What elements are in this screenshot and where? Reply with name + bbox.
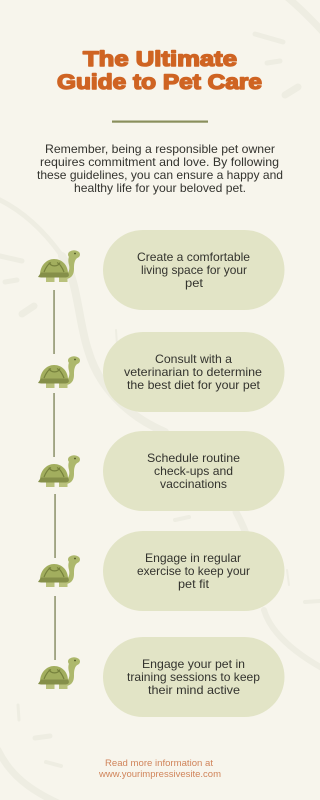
icon: turtle 4 [38,555,80,587]
panel: training: their mind active [148,683,240,697]
icon: turtle 1 [38,250,80,282]
connector line 2 [53,393,55,457]
panel: check-ups [103,431,284,511]
panel: living space [103,230,284,310]
panel: living space: pet [185,276,204,290]
panel: check-ups: vaccinations [160,477,227,491]
icon: turtle 5 [38,657,80,689]
intro text: these guidelines, you can ensure a happy and [37,168,283,182]
intro text [37,142,283,195]
panel: diet: the best diet for your pet [127,378,261,392]
footer: www.yourimpressivesite.com [98,769,221,780]
panel: training: Engage your pet in [142,657,245,671]
icon: turtle 2 [38,356,80,388]
panel: living space: living space for your [141,263,247,277]
panel: exercise [103,531,284,611]
connector line 4 [54,596,56,660]
intro text: healthy life for your beloved pet. [74,181,246,195]
connector line 1 [53,290,55,354]
icon: turtle 3 [38,455,80,487]
connector line 3 [54,494,56,558]
panel: check-ups: check-ups and [154,464,233,478]
panel: diet: Consult with a [155,352,232,366]
panel: training [103,637,284,717]
title [57,47,262,94]
intro text: Remember, being a responsible pet owner [45,142,275,156]
intro text: requires commitment and love. By following [40,155,279,169]
panel: training: training sessions to keep [127,670,260,684]
panel: exercise: exercise to keep your [137,564,250,578]
panel: check-ups: Schedule routine [147,451,240,465]
title: Guide to Pet Care [57,70,262,94]
title: The Ultimate [83,47,237,71]
title divider [112,120,208,123]
panel: diet: veterinarian to determine [124,365,262,379]
footer: Read more information at [105,758,213,769]
panel: exercise: Engage in regular [145,551,241,565]
panel: exercise: pet fit [178,577,210,591]
footer [98,758,221,780]
panel: diet [103,332,284,412]
panel: living space: Create a comfortable [137,250,250,264]
